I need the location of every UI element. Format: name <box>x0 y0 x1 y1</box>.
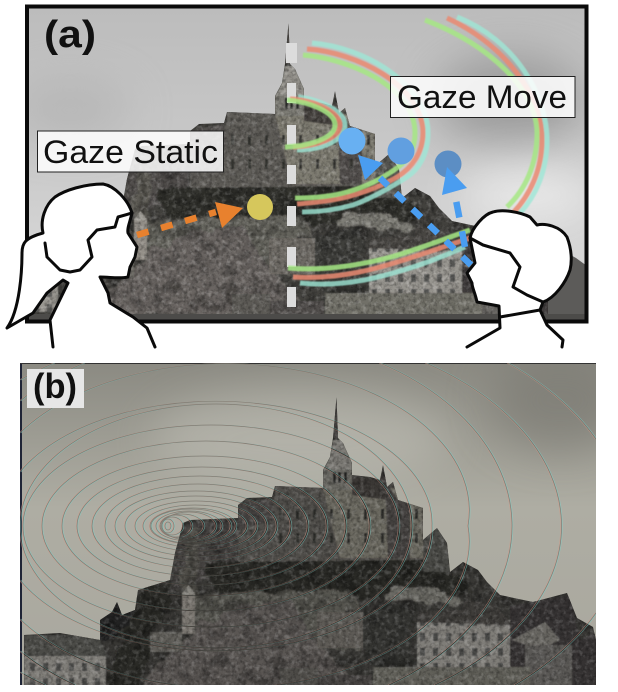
curved wavefront bands <box>285 17 547 284</box>
icon: right viewer with short hair <box>467 211 571 347</box>
panel: (a) gaze static and gaze move illustration <box>0 6 600 347</box>
panel label (b): (b) <box>33 367 77 406</box>
panel: (b) image with concentric ring distortion <box>19 350 618 690</box>
label: Gaze Move: Gaze Move <box>397 79 567 115</box>
blue arrow: diagonal gaze movement <box>358 155 471 265</box>
yellow static gaze point <box>247 194 273 220</box>
picture frame <box>27 6 586 322</box>
orange gaze arrow to static point <box>137 202 243 235</box>
blue arrow: upward gaze movement <box>442 167 467 247</box>
label: Gaze Static: Gaze Static <box>43 134 218 170</box>
icon: left viewer with ponytail <box>7 184 155 347</box>
blue moving gaze points <box>338 128 462 178</box>
center divider dashed line <box>286 43 297 307</box>
concentric rings <box>19 363 597 688</box>
photo: sepia Mont Saint-Michel with sky <box>20 350 618 690</box>
photo: grayscale Mont Saint-Michel with sky <box>0 6 600 322</box>
panel label (a): (a) <box>44 14 96 56</box>
